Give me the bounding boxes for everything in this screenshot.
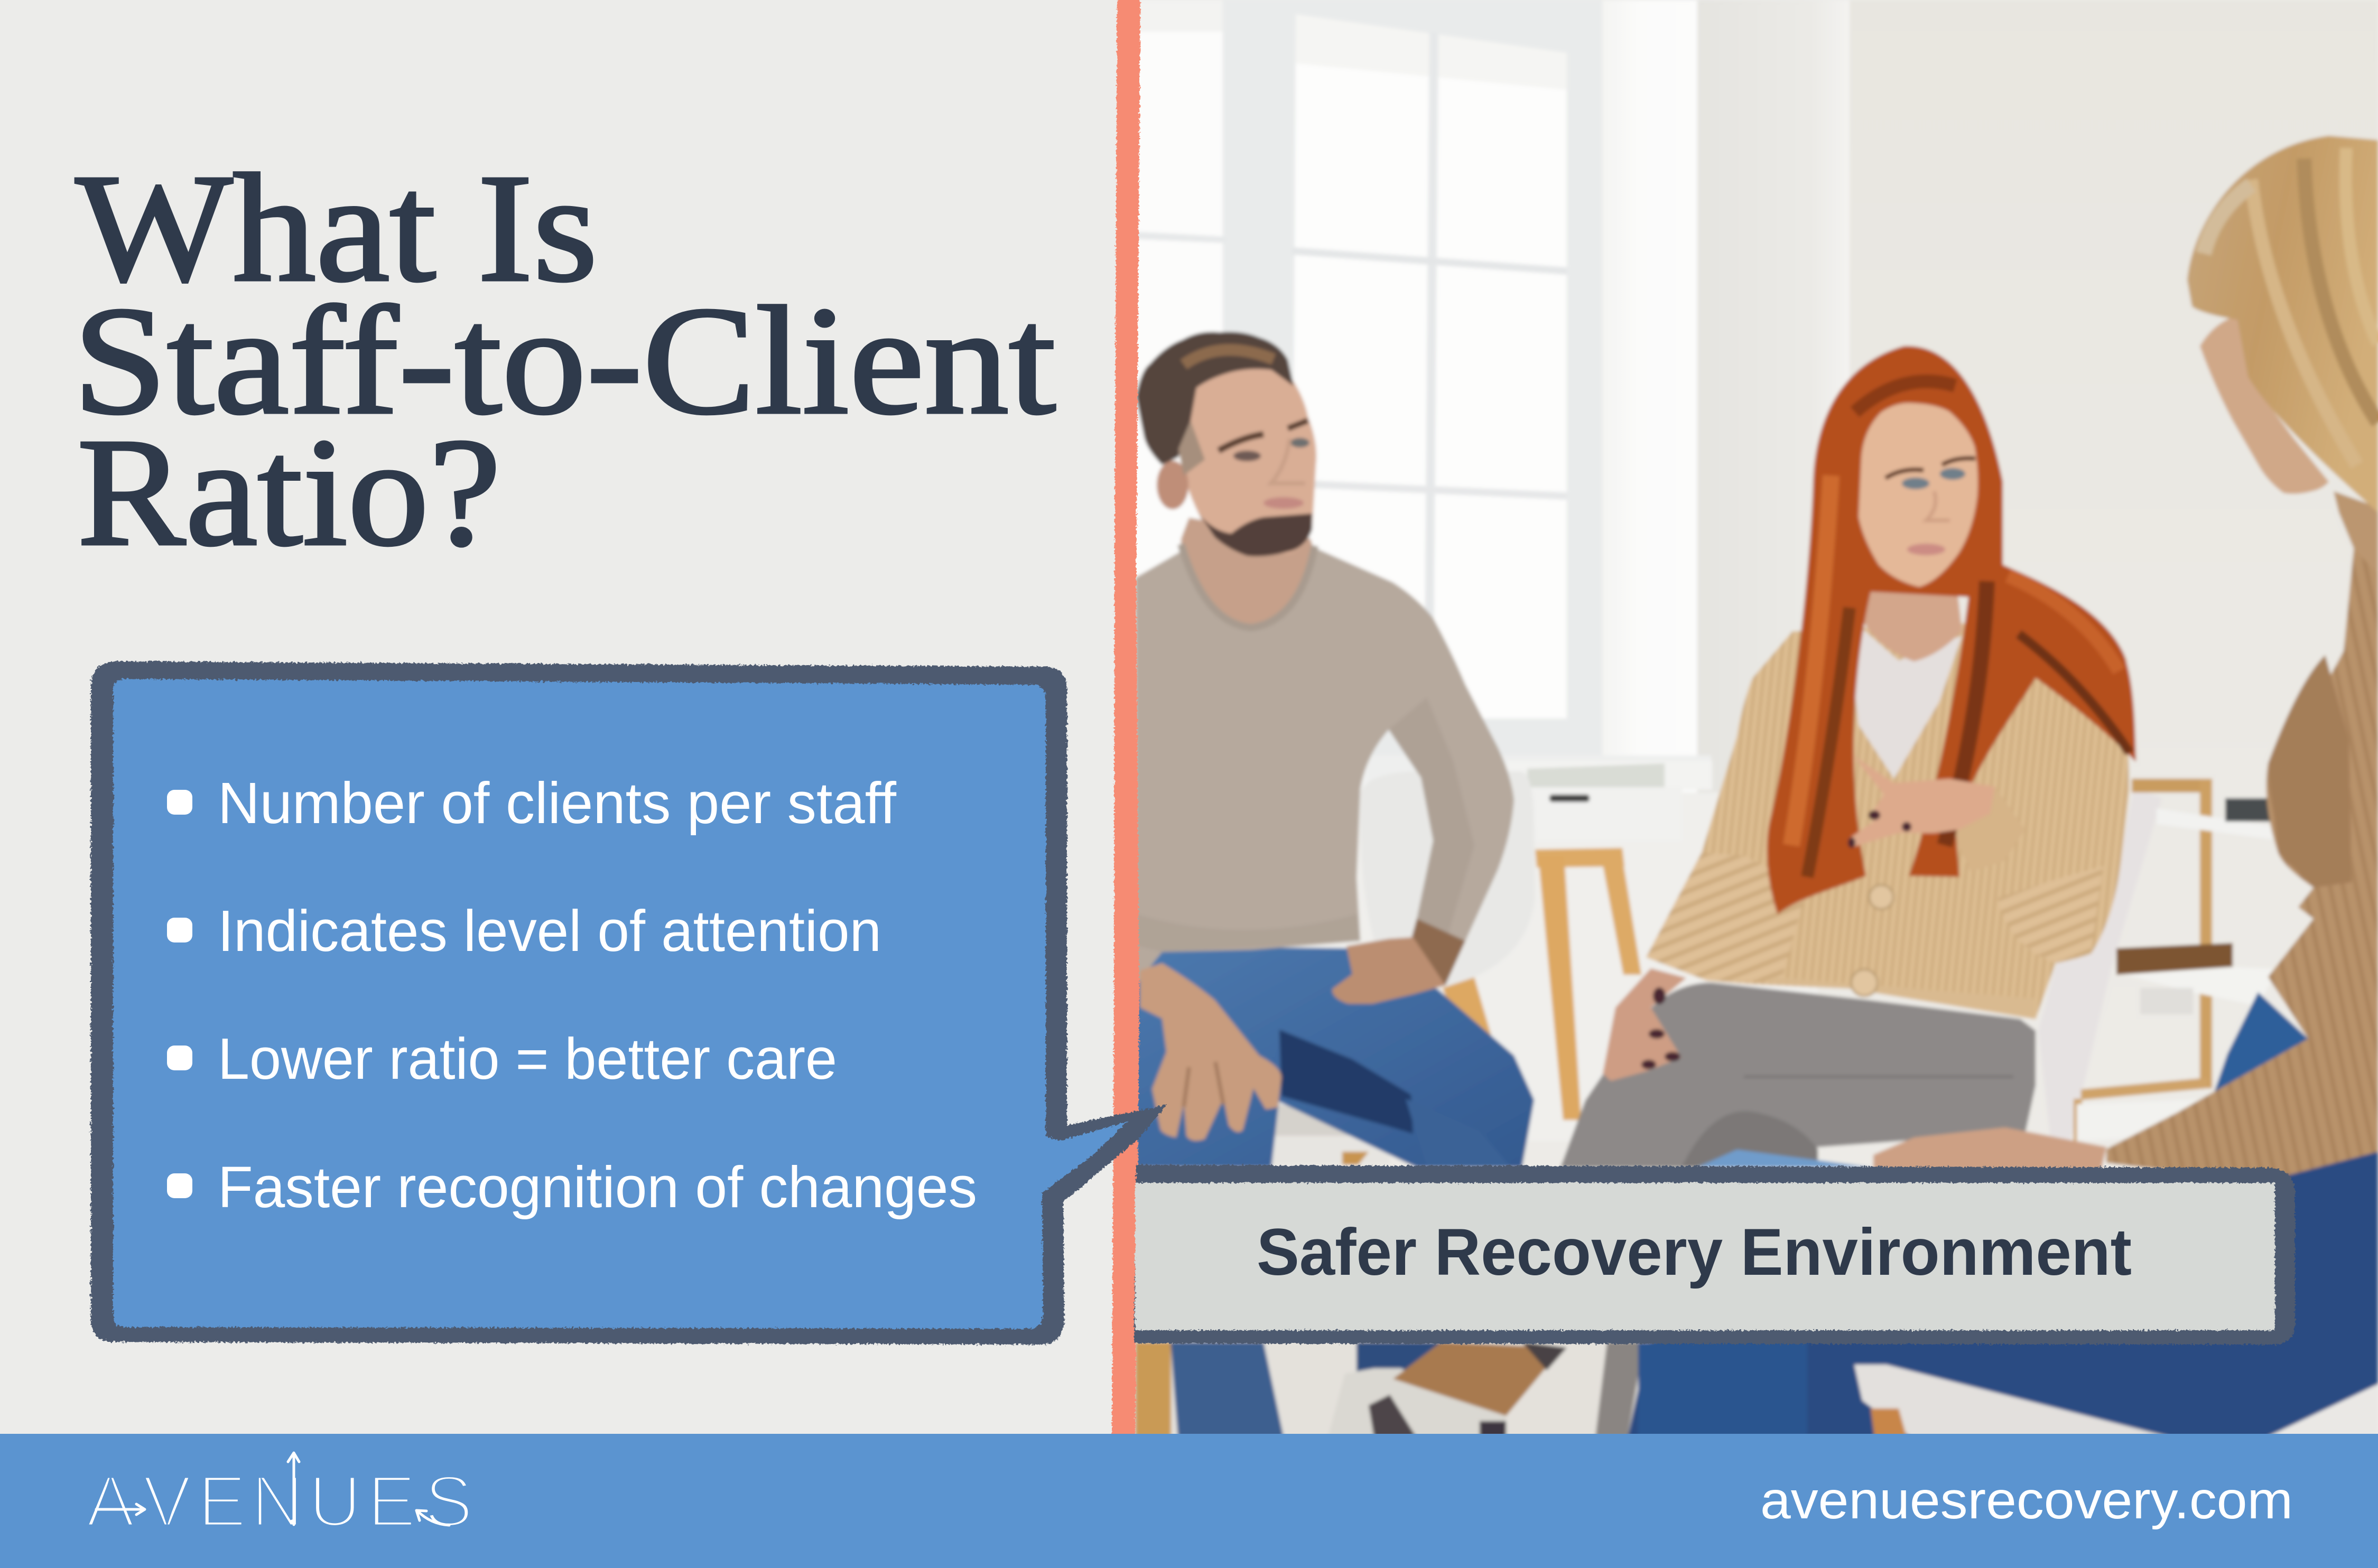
bullet list bbox=[167, 771, 977, 1220]
man: head and neck bbox=[1136, 332, 1316, 628]
bullet 4: Faster recognition of changes bbox=[218, 1155, 977, 1220]
redhead: t-shirt and neck bbox=[1853, 570, 1962, 779]
bullet 3: Lower ratio = better care bbox=[218, 1026, 837, 1091]
room: wall and window bbox=[1131, 0, 2378, 1434]
blonde woman: sweater and arm bbox=[1873, 528, 2378, 1187]
bubble outline and fill bbox=[91, 661, 1167, 1345]
shelves bbox=[2074, 779, 2278, 1141]
title: Ratio? bbox=[77, 407, 501, 578]
website URL: avenuesrecovery.com bbox=[1760, 1471, 2293, 1530]
coral divider strip bbox=[1112, 0, 1140, 1442]
blonde woman: face and hair bbox=[2187, 136, 2378, 574]
photo: three people in a group session bbox=[1131, 0, 2378, 1437]
left panel background bbox=[0, 0, 1131, 1434]
title bbox=[73, 143, 1056, 578]
panel: speech bubble bbox=[91, 661, 1167, 1345]
icon: logo arrows bbox=[96, 1453, 449, 1525]
footer bar bbox=[0, 1434, 2378, 1568]
bullet 2: Indicates level of attention bbox=[218, 899, 881, 964]
redhead: face bbox=[1859, 403, 1978, 587]
title: What Is bbox=[76, 143, 598, 314]
man: hands bbox=[1140, 919, 1465, 1141]
redhead: cardigan bbox=[1646, 620, 2129, 1019]
redhead: hair bbox=[1767, 346, 2136, 914]
panel: Safer Recovery Environment label bbox=[1134, 1165, 2295, 1345]
bullet 1: Number of clients per staff bbox=[218, 771, 896, 836]
title: Staff-to-Client bbox=[73, 275, 1056, 446]
redhead: pants bbox=[1560, 983, 2036, 1168]
side table with books bbox=[1527, 763, 1682, 1120]
man: legs and jeans bbox=[1135, 946, 1534, 1168]
logo: Avenues: AVENUES bbox=[86, 1461, 473, 1542]
redhead: back chair bbox=[2038, 787, 2162, 1140]
label text: Safer Recovery Environment bbox=[1257, 1216, 2132, 1289]
man: sweater bbox=[1135, 546, 1514, 983]
lower scene below label bbox=[1131, 1152, 2378, 1437]
label box bbox=[1134, 1165, 2295, 1345]
white chair behind man bbox=[1268, 771, 1535, 1165]
redhead: hands bbox=[1603, 755, 1995, 1081]
